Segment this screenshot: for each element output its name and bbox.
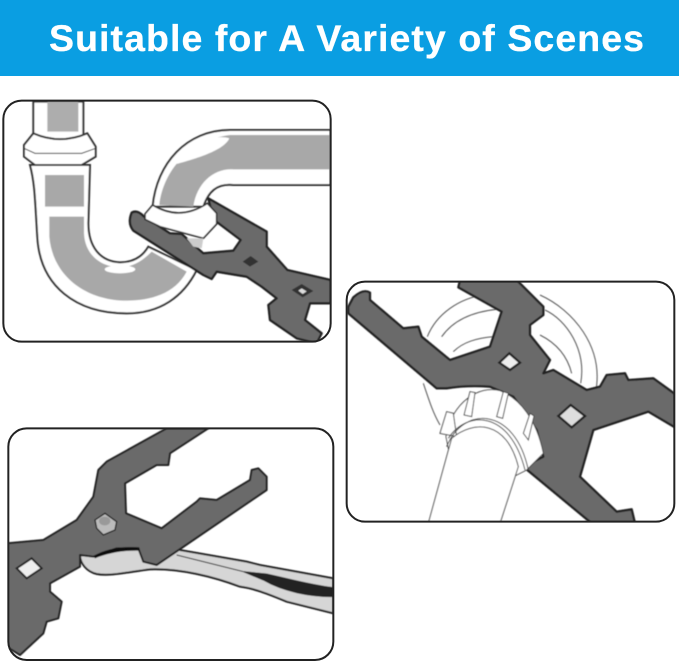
title: Suitable for A Variety of Scenes [49, 17, 644, 59]
illustration: wrench [348, 280, 675, 523]
illustration: compression nut [145, 203, 217, 238]
illustration: supply pipe and nut [428, 390, 543, 523]
illustration: wrench [130, 198, 331, 343]
illustration: square hole [17, 558, 42, 578]
illustration: P-trap pipe [24, 102, 331, 313]
illustration: pliers handle [80, 547, 333, 613]
panel: wrench on sink trap [3, 101, 331, 343]
header banner [0, 0, 679, 76]
illustration: wrench [7, 428, 267, 655]
illustration: bolt head [95, 513, 117, 535]
illustration: square holes [499, 353, 520, 370]
panel: wrench with pliers [7, 428, 333, 660]
panel: wrench on supply line nut [347, 280, 675, 523]
illustration: background flange arcs [423, 295, 597, 425]
